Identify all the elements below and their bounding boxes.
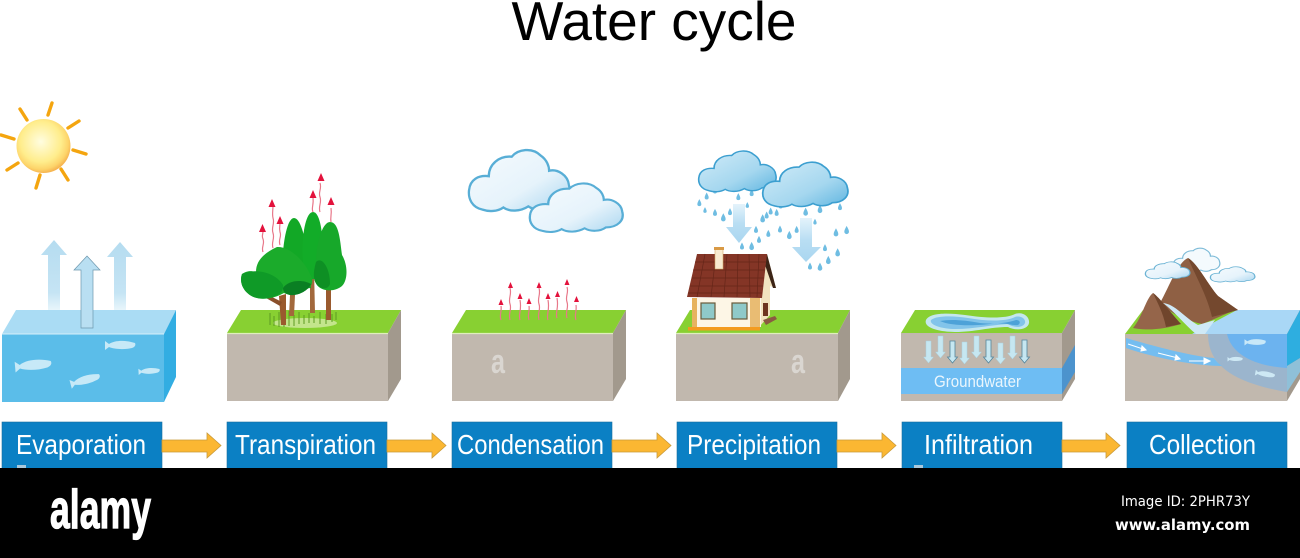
cloud: small [530,183,623,232]
ground and sea block [1125,310,1300,401]
ground block [452,310,626,401]
arrow: infiltration to collection [1062,433,1120,458]
watermark letter: a [791,343,806,381]
waterfall stream [1163,303,1215,334]
upper mountain cloud [1173,248,1220,272]
cloud: left rain cloud [699,151,776,192]
label: evaporation: Evaporation [16,429,146,460]
stream arrows [1128,344,1210,364]
rain arrows [726,204,821,262]
ground block [676,310,850,401]
transpiration arrows [259,173,334,252]
mountains [1133,258,1238,329]
fish [15,341,160,389]
rain drops [697,186,849,271]
trees [241,212,346,325]
grass patch [270,311,337,328]
water block [2,310,176,402]
icon: sun [1,103,86,188]
infiltration arrows [924,336,1030,364]
label: condensation [452,422,612,469]
panel: condensation [452,150,626,401]
site url: www.alamy.com [1115,516,1250,534]
alamy logo: alamy [50,478,151,540]
label: evaporation [2,422,162,469]
lake [926,313,1029,332]
arrow: condensation to precipitation [612,433,671,458]
label: transpiration [227,422,387,469]
side mountain clouds [1145,262,1255,282]
image id: Image ID: 2PHR73Y [1121,494,1250,510]
cloud: large [469,150,570,211]
panel: precipitation [676,151,850,401]
cloud: right rain cloud [763,162,848,207]
panel: evaporation [1,103,176,402]
arrow: transpiration to condensation [387,433,446,458]
ground block [901,310,1075,401]
arrow: precipitation to infiltration [837,433,896,458]
label: transpiration: Transpiration [235,429,376,460]
footer bar [0,468,1300,558]
label: precipitation: Precipitation [687,429,821,460]
label: precipitation [677,422,837,469]
panel: collection [1125,248,1300,401]
label: infiltration: Infiltration [924,429,1033,460]
panel: infiltration [901,310,1075,401]
sea fish [1228,339,1275,379]
evaporation arrows [41,240,133,328]
label: infiltration [902,422,1062,469]
icon: house [687,247,777,330]
groundwater label: Groundwater [934,372,1021,391]
watermark letter: a [491,343,506,381]
arrow: evaporation to transpiration [162,433,221,458]
ground block [227,310,401,401]
label: collection [1127,422,1287,469]
label: condensation: Condensation [457,429,604,460]
label: collection: Collection [1149,429,1256,460]
rising vapour arrows [498,279,579,320]
panel: transpiration [227,173,401,401]
